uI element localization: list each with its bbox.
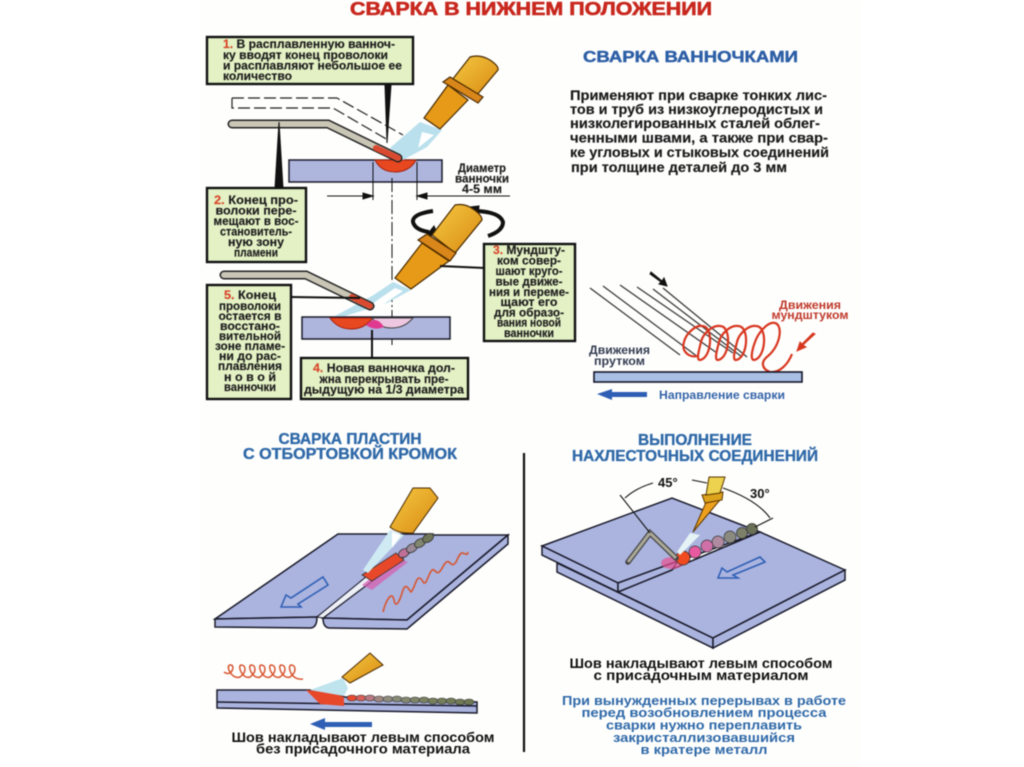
callout 3: для образо-: [494, 306, 564, 320]
callout 3: 3. Мундшту-: [493, 243, 565, 257]
callout 2: 2. Конец про-: [214, 193, 298, 207]
diameter label: 4-5 мм: [462, 182, 502, 196]
caption: with filler: с присадочным материалом: [594, 668, 809, 683]
flame core 1: [418, 132, 434, 148]
upper plate seam edge: [618, 561, 678, 592]
right plate front and side: [323, 535, 508, 629]
flame core: [392, 532, 401, 548]
blue arrow: [310, 718, 372, 730]
flange strip: [317, 572, 380, 618]
callout 5: восстано-: [220, 319, 280, 333]
caption: with filler: Шов накладывают левым способом: [570, 656, 833, 671]
callout 5: проволоки: [219, 299, 281, 313]
label: rod movement: прутком: [594, 354, 645, 368]
heading: flanged plates: СВАРКА ПЛАСТИН: [278, 431, 422, 448]
callout 5: 5. Конец: [224, 288, 277, 302]
callout 3: вания новой: [497, 316, 561, 330]
caption: with filler: [570, 656, 833, 683]
blue outline arrow: [718, 557, 765, 578]
angle 30: 30°: [750, 486, 770, 501]
torch: [390, 488, 438, 533]
flame: [310, 678, 348, 696]
heading: flanged plates: С ОТБОРТОВКОЙ КРОМОК: [243, 445, 458, 463]
callout 2: мещают в вос-: [214, 214, 298, 228]
callout 5: вительной: [219, 329, 281, 343]
callout 3: ния и переме-: [489, 285, 569, 299]
blue direction arrow: [597, 389, 647, 400]
welding wire 2: [224, 275, 370, 306]
rod strokes: [590, 285, 747, 357]
heading: lap joints: [572, 432, 818, 465]
welding wire 1 fill: [232, 124, 398, 158]
callout 5: ванночки: [224, 380, 276, 394]
left plate: [215, 534, 432, 619]
leaders: [291, 266, 485, 358]
description text: тов и труб из низкоуглеродистых и: [570, 102, 823, 117]
flame 2: [335, 282, 411, 316]
description text: при толщине деталей до 3 мм: [571, 160, 787, 175]
heading: lap joints: ВЫПОЛНЕНИЕ: [638, 432, 752, 449]
glow: [661, 557, 683, 569]
note: breaks in work: в кратере металл: [640, 742, 768, 757]
callout 2: пламени: [234, 246, 278, 260]
panel: puddle welding diagrams: [207, 37, 575, 399]
torch: [342, 653, 383, 683]
plate division: [217, 702, 477, 706]
callout 2: ную зону: [228, 235, 284, 249]
description text: ченными швами, а также при свар-: [570, 130, 828, 146]
flame: [677, 533, 700, 555]
heading: flanged plates: [243, 431, 458, 463]
wire 1 tip: [376, 148, 398, 158]
welding wire 2 fill: [224, 275, 370, 306]
label: torch movement: мундштуком: [772, 308, 849, 322]
callout 4: дыдущую на 1/3 диаметра: [304, 382, 464, 396]
callout 3: [484, 243, 575, 341]
melt: [306, 690, 344, 706]
callout 5: ни до рас-: [219, 349, 281, 363]
callout 4: жна перекрывать пре-: [319, 372, 448, 386]
callout 5: остается в: [218, 309, 282, 323]
callout 5: зоне пламе-: [215, 339, 285, 353]
note: breaks in work: перед возобновлением процесса: [582, 705, 827, 720]
description text: Применяют при сварке тонких лис-: [570, 88, 827, 103]
weld pools 2: [330, 318, 413, 329]
note: breaks in work: [562, 693, 846, 757]
divider: [523, 453, 525, 752]
chart: rod and torch movements: [589, 272, 849, 402]
callout 3: шают круго-: [496, 264, 562, 278]
black movement arrow: [650, 272, 667, 286]
beads: [347, 695, 474, 705]
wire 2 tip: [352, 297, 370, 306]
flame: [363, 530, 404, 573]
caption: no filler: [232, 730, 495, 756]
glow: [362, 558, 408, 590]
diameter label: Диаметр: [458, 161, 506, 175]
callout 3: ванночки: [504, 326, 554, 340]
torch 1: [424, 56, 498, 129]
base plate 2: [302, 317, 450, 339]
left plate front: [215, 617, 317, 628]
base plate 1: [289, 160, 442, 182]
note: breaks in work: сварки нужно переплавить: [606, 718, 802, 732]
callout 3: щают его: [500, 295, 558, 309]
angle lines: [620, 480, 773, 533]
callout 1: и расплавляют небольшое ее: [223, 58, 402, 72]
flame core 2: [372, 288, 403, 308]
description text: низколегированных сталей облег-: [570, 116, 820, 131]
plate: [594, 372, 802, 382]
wire fill: [628, 533, 676, 562]
description text: ке угловых и стыковых соединений: [570, 145, 829, 160]
upper plate top: [542, 498, 760, 583]
red arrow: [797, 333, 815, 351]
diagram: lap joint: [542, 475, 845, 648]
dimension lines: [327, 162, 510, 345]
callout 4: [301, 358, 468, 399]
label: torch movement: [772, 298, 849, 322]
torch: [693, 477, 725, 532]
red spiral: [683, 323, 792, 372]
callout 3: ком совер-: [497, 254, 561, 268]
diagram: flanged plates side view: [217, 653, 477, 730]
diameter label: [455, 161, 509, 196]
direction label: Направление сварки: [659, 388, 785, 402]
red squiggle: [383, 552, 468, 612]
label: rod movement: [589, 343, 650, 368]
torch 2: [395, 204, 482, 289]
weld pool 1: [375, 160, 416, 172]
diameter label: ванночки: [455, 172, 509, 186]
weld beads: [362, 531, 435, 581]
spiral: [224, 665, 303, 679]
welding wire 1: [232, 124, 398, 158]
label: rod movement: Движения: [589, 343, 650, 357]
callout 5: н о в о й: [224, 370, 276, 384]
heading: puddle welding: СВАРКА ВАННОЧКАМИ: [583, 49, 798, 66]
weld beads: [676, 524, 758, 565]
callout 1: [207, 37, 413, 84]
wire: [628, 533, 676, 562]
caption: no filler: Шов накладывают левым способом: [232, 730, 495, 745]
rotation arrows: [413, 206, 503, 236]
heading: lap joints: НАХЛЕСТОЧНЫХ СОЕДИНЕНИЙ: [572, 447, 818, 465]
dashed previous wire position: [232, 98, 403, 140]
flame 1: [390, 122, 442, 160]
callout 2: становитель-: [220, 224, 292, 238]
label: torch movement: Движения: [779, 298, 841, 312]
diagram: flanged plates perspective: [215, 488, 508, 629]
lower plate left edge: [557, 563, 713, 648]
callout 1: 1. В расплавленную ванноч-: [223, 37, 395, 51]
note: breaks in work: При вынужденных перерывах в работе: [562, 693, 846, 708]
callout 5: [207, 285, 291, 399]
callout 1: количество: [223, 69, 292, 83]
note: breaks in work: закристаллизовавшийся: [613, 730, 795, 745]
page background: [200, 0, 860, 767]
callout 1: ку вводят конец проволоки: [223, 48, 388, 62]
right plate: [323, 535, 508, 620]
description text: [570, 88, 829, 175]
blue outline arrow: [281, 577, 328, 607]
angle 45: 45°: [658, 475, 678, 490]
callout 5: плавления: [218, 359, 282, 373]
callout 4: 4. Новая ванночка дол-: [313, 361, 455, 375]
callout 2: волоки пере-: [216, 204, 296, 218]
caption: no filler: без присадочного материала: [256, 742, 471, 756]
callout 2: [207, 188, 306, 262]
upper plate front: [542, 546, 618, 592]
leader lines: [275, 85, 391, 188]
callout 3: вые движе-: [496, 274, 562, 288]
lower plate front: [713, 570, 845, 648]
plates: [217, 690, 477, 713]
lower plate top: [618, 532, 845, 638]
